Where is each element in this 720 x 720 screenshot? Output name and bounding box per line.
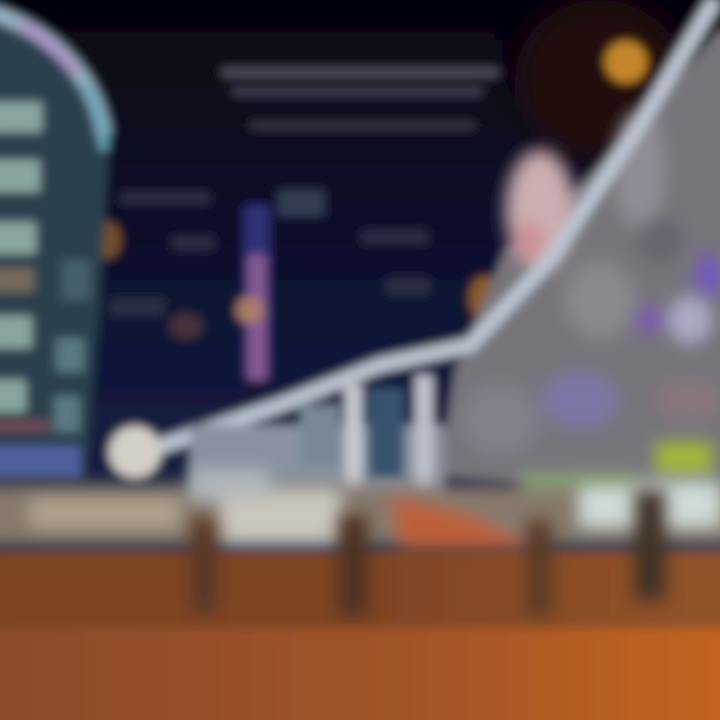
walkway supports [109,375,445,500]
street ground [0,552,720,720]
column text labels [110,190,430,316]
orange lights [91,221,499,339]
tower [236,205,270,380]
street level lights [0,442,720,550]
left curved building [0,10,110,480]
heading text [222,68,498,129]
elevated walkway [150,5,712,450]
pedestrians [190,490,666,615]
right building facade [440,30,720,500]
moon [605,41,647,83]
